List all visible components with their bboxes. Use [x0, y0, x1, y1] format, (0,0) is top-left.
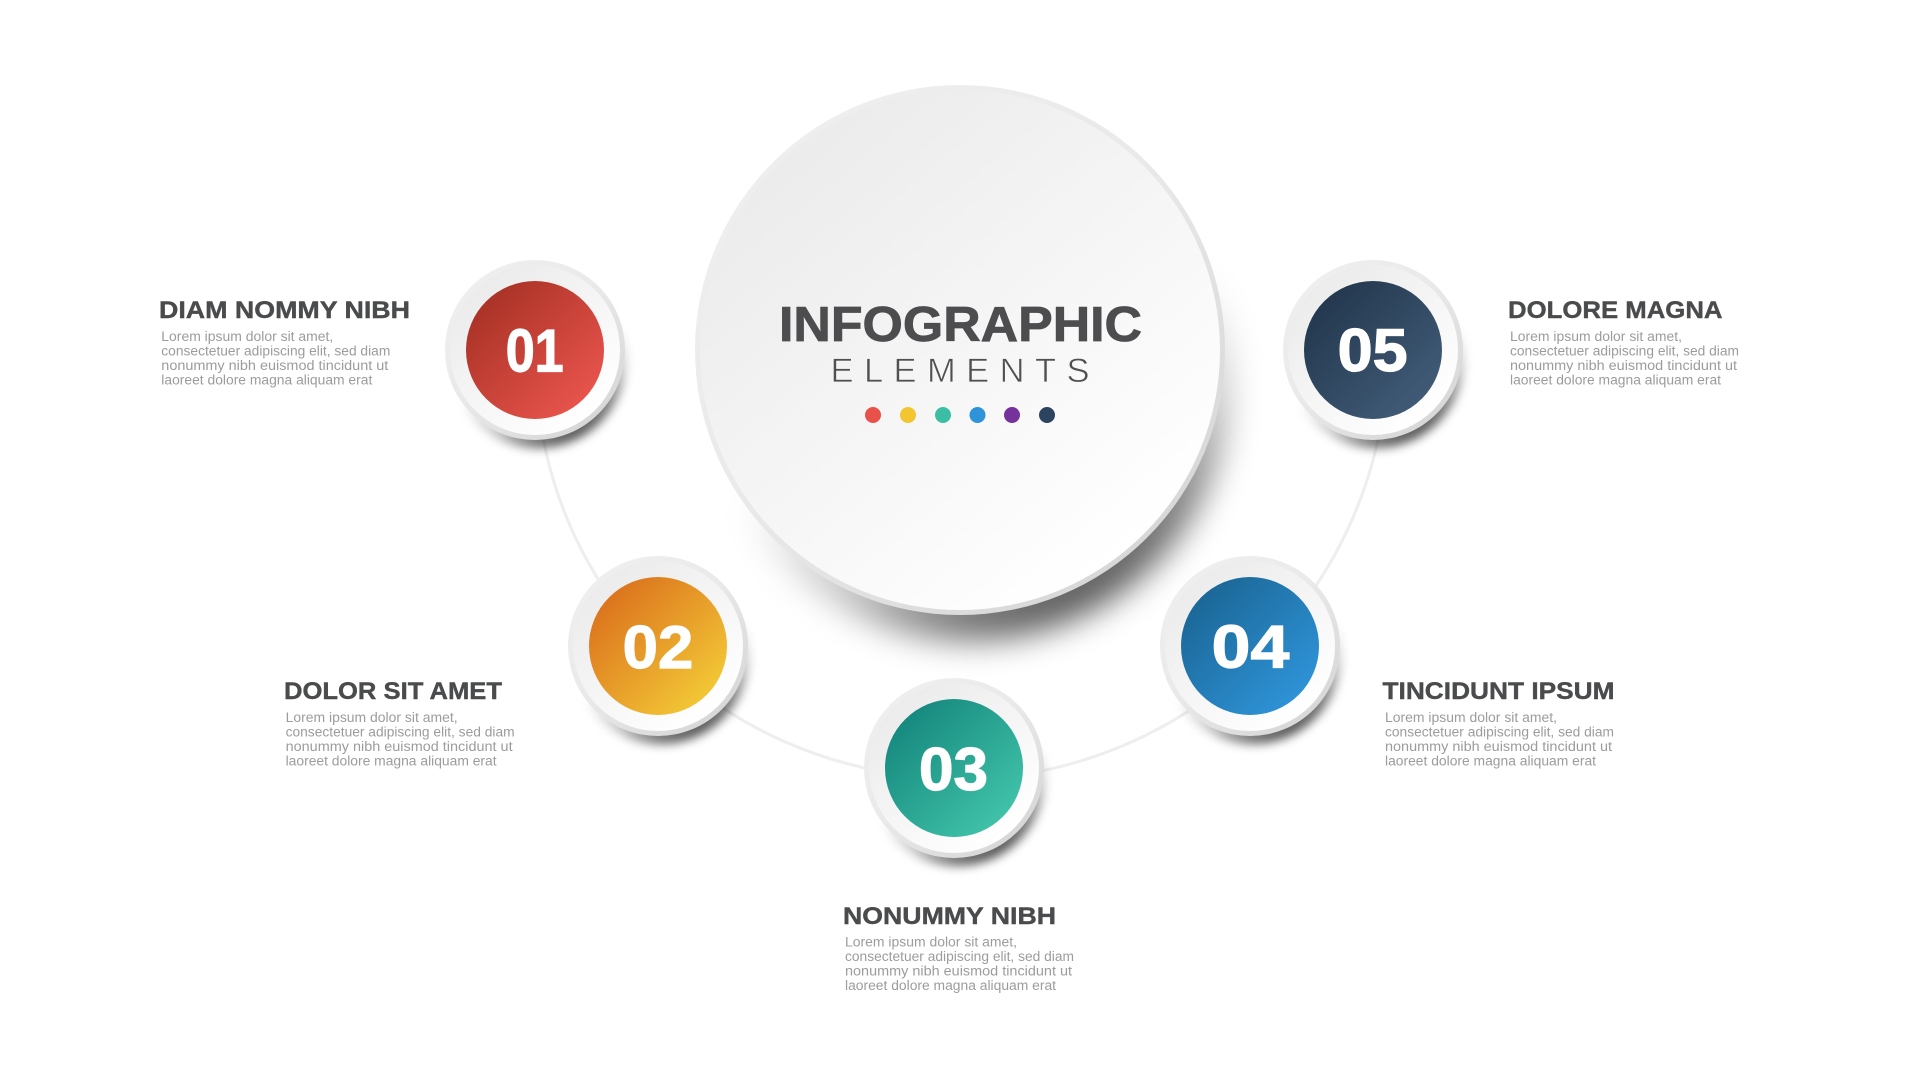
label: step 03: nonummy nibh euismod tincidunt ut [845, 964, 1072, 978]
label: step 04 [1382, 678, 1614, 768]
label: step 03 [843, 903, 1074, 993]
label: step 05: laoreet dolore magna aliquam erat [1510, 372, 1721, 388]
label: step 05: DOLORE MAGNA [1508, 297, 1722, 324]
label: step 04: TINCIDUNT IPSUM [1382, 678, 1614, 705]
label: step 04: laoreet dolore magna aliquam erat [1385, 754, 1596, 768]
label: step 03: Lorem ipsum dolor sit amet, [845, 934, 1017, 950]
label: step 02: nonummy nibh euismod tincidunt ut [286, 739, 513, 754]
title: INFOGRAPHIC [779, 298, 1142, 352]
label: step 04: Lorem ipsum dolor sit amet, [1385, 710, 1557, 725]
label: step 03: consectetuer adipiscing elit, sed diam [845, 949, 1074, 964]
label: step 01: DIAM NOMMY NIBH [159, 297, 410, 324]
label: step 05 [1508, 297, 1739, 388]
label: step 01: laoreet dolore magna aliquam erat [161, 372, 373, 388]
label: step 05: consectetuer adipiscing elit, sed diam [1510, 344, 1739, 358]
badge 02 [568, 556, 749, 744]
label: step 02: DOLOR SIT AMET [284, 678, 502, 705]
label: step 01: Lorem ipsum dolor sit amet, [161, 329, 333, 344]
label: step 01: consectetuer adipiscing elit, sed diam [161, 344, 390, 358]
badge 01: 01 [506, 318, 564, 384]
label: step 05: nonummy nibh euismod tincidunt ut [1510, 358, 1737, 373]
badge 04 [1160, 556, 1341, 744]
colour dots [865, 407, 1055, 423]
label: step 02: consectetuer adipiscing elit, sed diam [286, 724, 515, 740]
subtitle: ELEMENTS [830, 352, 1090, 390]
label: step 03: NONUMMY NIBH [843, 903, 1056, 930]
central circle shadow [707, 116, 1231, 640]
label: step 01 [159, 297, 410, 388]
label: step 02 [284, 678, 515, 768]
label: step 01: nonummy nibh euismod tincidunt ut [161, 358, 389, 373]
central circle rim [695, 85, 1225, 615]
panel: central circle [695, 85, 1231, 640]
badge 01 [445, 260, 626, 448]
label: step 04: nonummy nibh euismod tincidunt ut [1385, 739, 1612, 754]
label: step 04: consectetuer adipiscing elit, sed diam [1385, 724, 1614, 740]
label: step 02: Lorem ipsum dolor sit amet, [286, 710, 458, 725]
badge 05: 05 [1338, 317, 1408, 384]
label: step 02: laoreet dolore magna aliquam erat [286, 754, 497, 768]
label: step 05: Lorem ipsum dolor sit amet, [1510, 329, 1682, 344]
label: step 03: laoreet dolore magna aliquam erat [845, 978, 1056, 993]
connector arc [540, 420, 1380, 773]
badge 05 [1283, 260, 1464, 448]
badge 02: 02 [623, 614, 693, 681]
badge 04: 04 [1212, 614, 1290, 680]
badge 03: 03 [919, 736, 988, 803]
central circle plate [700, 90, 1220, 610]
badge 03 [864, 678, 1045, 866]
